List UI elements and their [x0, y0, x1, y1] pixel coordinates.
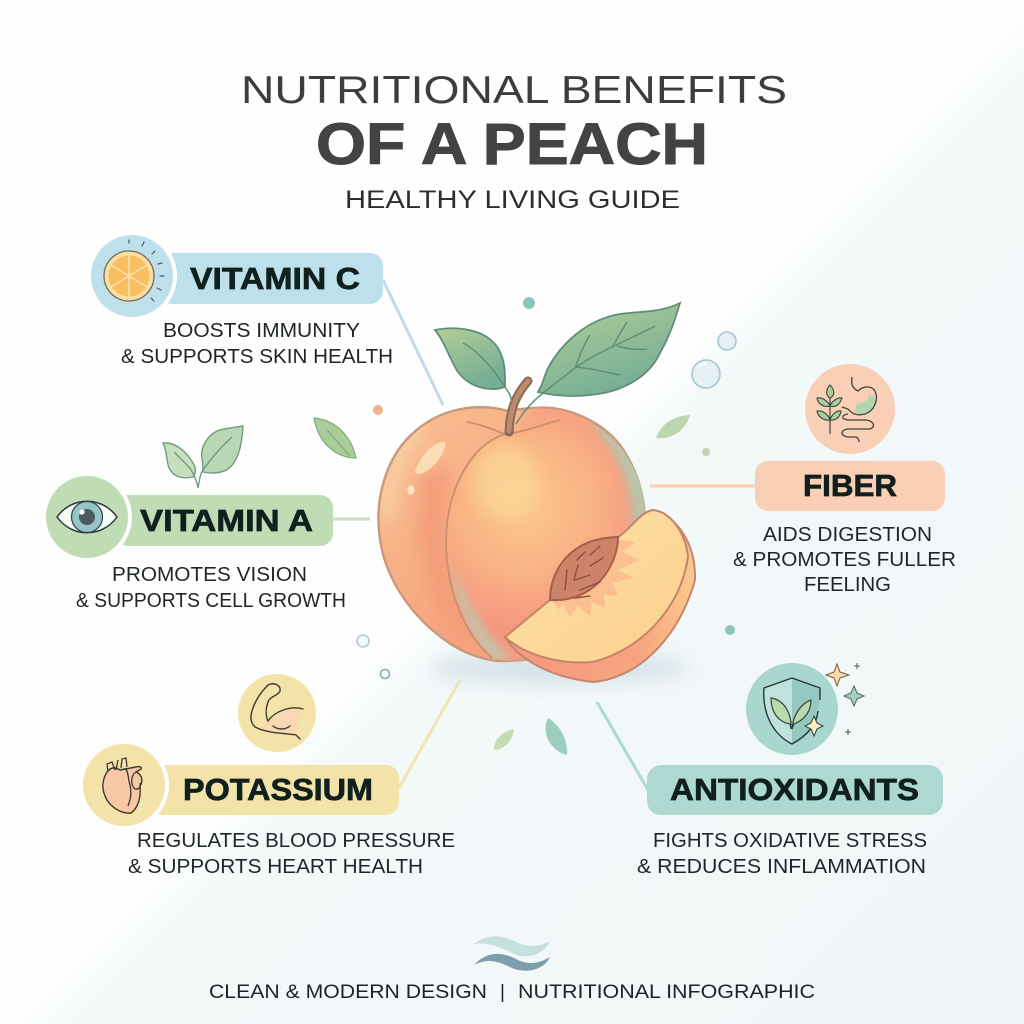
icon: shield	[746, 663, 838, 755]
dot	[523, 297, 535, 309]
description	[733, 524, 956, 596]
label pill	[755, 461, 945, 511]
description	[637, 830, 927, 878]
description: REGULATES BLOOD PRESSURE	[137, 830, 455, 852]
heading: VITAMIN C	[190, 261, 360, 296]
connector: vitamin a	[333, 518, 370, 520]
description: & SUPPORTS SKIN HEALTH	[121, 346, 393, 368]
icon: floating leaf	[314, 418, 356, 458]
icon: orange slice	[87, 231, 177, 321]
description: BOOSTS IMMUNITY	[163, 320, 360, 342]
heading: POTASSIUM	[183, 772, 373, 807]
ground shadow	[430, 654, 690, 682]
description: & PROMOTES FULLER	[733, 549, 956, 571]
icon: eye	[42, 472, 132, 562]
description	[121, 320, 393, 368]
small leaf	[435, 328, 512, 402]
description	[128, 830, 455, 878]
footer text: CLEAN & MODERN DESIGN	[209, 982, 487, 1003]
peach highlights	[415, 442, 445, 474]
title: OF A PEACH	[316, 112, 708, 177]
footer	[209, 936, 815, 1003]
heading: FIBER	[803, 468, 897, 503]
label pill	[647, 765, 943, 815]
panel: antioxidants	[637, 663, 943, 878]
footer text: NUTRITIONAL INFOGRAPHIC	[518, 982, 815, 1003]
title: HEALTHY LIVING GUIDE	[345, 186, 680, 214]
description: PROMOTES VISION	[112, 564, 307, 586]
icon: waves	[474, 936, 550, 971]
heading: VITAMIN A	[140, 503, 313, 538]
description: FIGHTS OXIDATIVE STRESS	[653, 830, 927, 852]
description: FEELING	[804, 574, 891, 596]
footer text	[209, 982, 815, 1003]
panel: vitamin c	[87, 231, 393, 368]
panel: vitamin a	[42, 472, 346, 612]
icon: sprout	[163, 426, 243, 488]
connector: potassium	[399, 680, 460, 788]
connector: vitamin c	[383, 280, 443, 405]
peach crease	[446, 420, 560, 658]
title: NUTRITIONAL BENEFITS	[241, 69, 787, 112]
description: & REDUCES INFLAMMATION	[637, 856, 926, 878]
description: AIDS DIGESTION	[763, 524, 932, 546]
panel: potassium	[79, 674, 455, 878]
stem	[509, 381, 528, 432]
description	[76, 564, 346, 612]
connector: fiber	[650, 484, 755, 488]
icon: sparkles	[826, 663, 864, 735]
connector: antioxidants	[597, 702, 648, 790]
icon: peach illustration	[378, 303, 695, 682]
large leaf	[516, 303, 680, 424]
label pill	[160, 253, 383, 304]
label pill	[150, 765, 399, 815]
footer text: |	[500, 982, 505, 1003]
icon: digestion and plant	[805, 364, 895, 454]
peach back lobe	[378, 407, 645, 661]
label pill	[115, 495, 333, 546]
panel: fiber	[733, 364, 956, 596]
icon: heart	[79, 740, 169, 830]
peach front lobe	[446, 408, 650, 662]
decorative bubbles and leaves	[357, 332, 736, 755]
heading: ANTIOXIDANTS	[670, 772, 919, 807]
description: & SUPPORTS CELL GROWTH	[76, 590, 346, 612]
peach slice	[505, 510, 695, 682]
dot	[373, 405, 383, 415]
description: & SUPPORTS HEART HEALTH	[128, 856, 423, 878]
icon: muscle arm	[238, 674, 316, 752]
title	[241, 69, 787, 214]
